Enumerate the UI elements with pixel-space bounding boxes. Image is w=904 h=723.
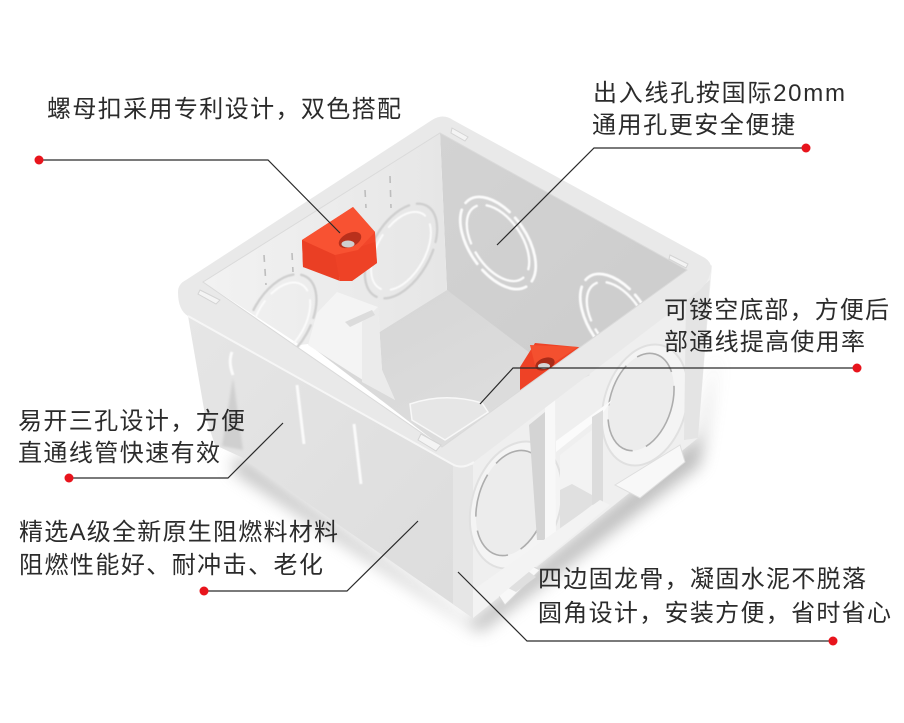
top rim [178, 116, 711, 467]
rim corner tabs [198, 128, 688, 451]
callout: 20mm holes: 通用孔更安全便捷 [592, 112, 795, 139]
callout: three knockouts [18, 408, 283, 482]
callout: three knockouts: 直通线管快速有效 [18, 440, 220, 467]
red dot [64, 474, 74, 482]
leader line [204, 521, 418, 591]
callout: four-side keel [458, 566, 891, 646]
callout: 20mm holes [497, 80, 845, 245]
text block: 易开三孔设计，方便 [18, 408, 245, 435]
leader line [480, 368, 857, 404]
callout: hollow bottom [480, 297, 889, 404]
red dot [828, 636, 838, 646]
interior base and floor [290, 290, 590, 447]
right outer wall [460, 265, 712, 618]
front red clip [520, 343, 590, 395]
text block: 可镂空底部，方便后 [664, 297, 889, 324]
callout: four-side keel: 圆角设计，安装方便，省时省心 [538, 600, 891, 627]
center ribs [529, 412, 545, 540]
leader line [458, 572, 833, 641]
red dot [852, 364, 862, 372]
lower-left round knockout [455, 430, 577, 580]
leader line [497, 148, 806, 245]
corner column [453, 465, 473, 618]
leader line [39, 160, 340, 233]
text block: 出入线孔按国际20mm [593, 80, 845, 107]
interior back-right wall [440, 133, 687, 372]
flange tabs [615, 445, 685, 498]
right outer margin [684, 280, 710, 440]
knockout holes on the back-left wall [252, 202, 438, 348]
callout: flame-retardant material: 阻燃性能好、耐冲击、老化 [19, 552, 323, 579]
interior back-left wall [203, 133, 447, 345]
dashed score marks [264, 176, 391, 285]
corner pillar [308, 292, 395, 400]
left outer wall [187, 300, 473, 618]
floor knockout [410, 398, 488, 440]
right wall ribs and knockouts [453, 280, 710, 618]
callout: flame-retardant material [19, 519, 418, 596]
leader line [69, 423, 283, 478]
red dot [34, 156, 44, 164]
red dot [200, 586, 208, 596]
upper-right round knockout [588, 334, 702, 476]
heading text: 螺母扣采用专利设计，双色搭配 [47, 96, 401, 123]
red dot [802, 144, 810, 152]
junction box product photo [178, 116, 718, 632]
callout: hollow bottom: 部通线提高使用率 [664, 329, 865, 356]
text block: 四边固龙骨，凝固水泥不脱落 [538, 566, 866, 593]
knockout holes on the back-right wall [458, 195, 642, 338]
drop shadow [232, 350, 718, 632]
back red clip [302, 207, 377, 281]
callout: nut clip [34, 96, 401, 233]
left wall knockout slits [230, 352, 361, 484]
text block: 精选A级全新原生阻燃料材料 [19, 519, 338, 546]
